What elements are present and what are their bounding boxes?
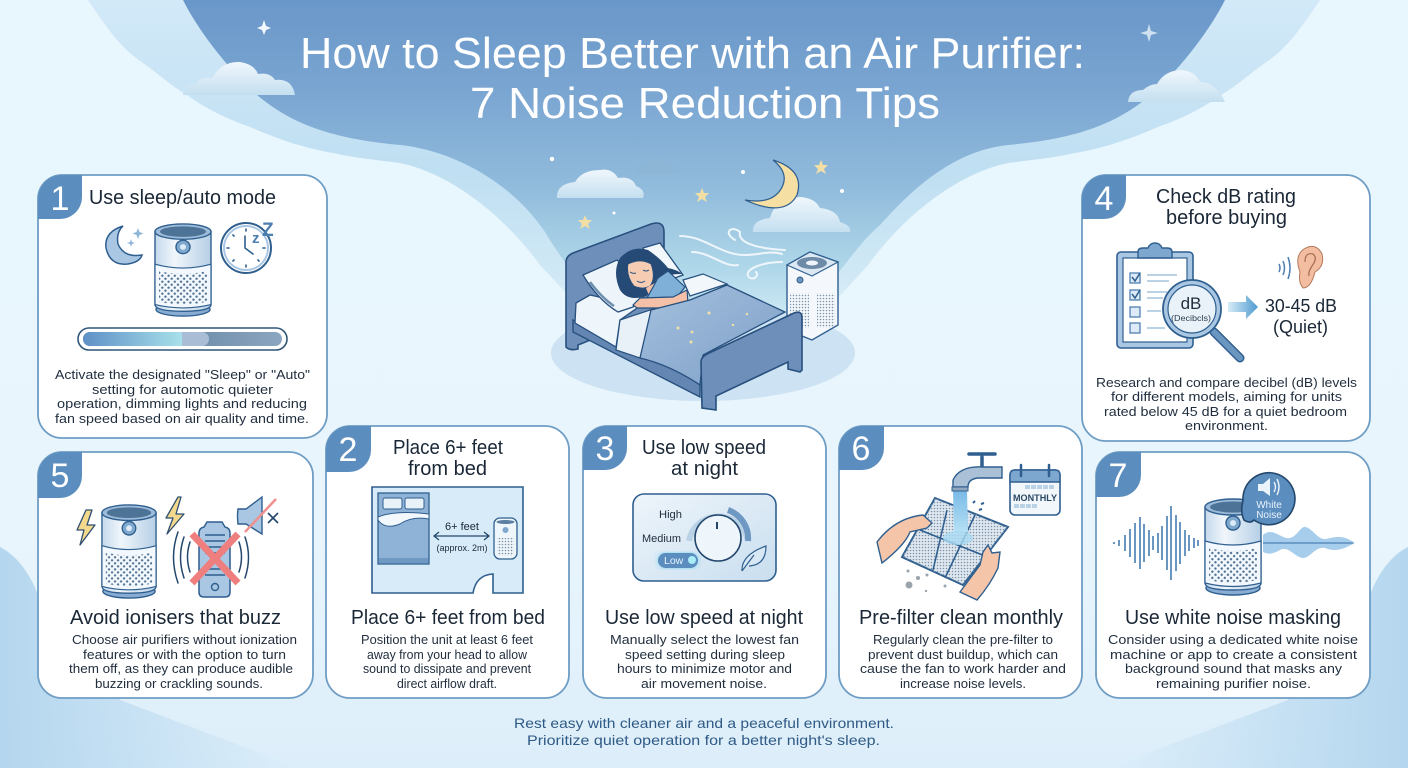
heading lower: Place 6+ feet from bed	[351, 607, 545, 629]
description: Activate the designated "Sleep" or "Auto"	[55, 367, 310, 382]
person	[616, 249, 688, 308]
number badge 6	[839, 426, 884, 470]
description: air movement noise.	[641, 676, 767, 691]
description: fan speed based on air quality and time.	[55, 411, 309, 426]
hero: sleeping person with air purifier	[550, 157, 855, 410]
description: away from your head to allow	[367, 647, 528, 662]
bed side rail	[573, 320, 700, 397]
stars	[550, 157, 844, 229]
number badge 7: 7	[1109, 457, 1127, 495]
waveform	[1114, 506, 1198, 580]
number badge 1	[38, 175, 82, 219]
heading: Use sleep/auto mode	[89, 187, 276, 209]
heading lower: Use low speed at night	[605, 607, 803, 629]
panel: tip 4 check dB rating	[1082, 175, 1370, 441]
label: 30-45 dB quiet	[1265, 296, 1337, 337]
moon	[745, 160, 799, 208]
night sky clouds	[557, 159, 850, 232]
icon: lightning bolts	[77, 497, 184, 545]
icon: purifier	[102, 505, 156, 598]
smooth wave	[1263, 527, 1355, 558]
description: features or with the option to turn	[83, 647, 286, 662]
heading	[642, 437, 766, 480]
top sheet	[683, 274, 727, 296]
icon: clock with zzz: z	[252, 230, 260, 247]
number badge 1: 1	[51, 180, 69, 218]
control dial panel	[633, 494, 776, 581]
description: cause the fan to work harder and	[860, 661, 1066, 676]
icon: ioniser crossed out	[174, 522, 248, 597]
speed slider bar	[78, 328, 287, 350]
panel: tip 6 pre-filter clean	[839, 426, 1082, 698]
icon: filter under tap with hands	[877, 454, 1060, 600]
description: Choose air purifiers without ionization	[72, 632, 297, 647]
headboard	[566, 223, 664, 350]
airflow lines	[680, 229, 785, 279]
room plan diagram	[372, 487, 523, 593]
description	[1096, 375, 1358, 433]
title: 7 Noise Reduction Tips	[470, 79, 940, 128]
mattress	[575, 295, 640, 347]
icon: air purifier	[155, 224, 211, 316]
blanket fold	[616, 309, 653, 358]
room plan diagram: (approx. 2m)	[436, 543, 488, 553]
pillow	[583, 260, 650, 312]
icon: magnifier with dB: dB	[1181, 294, 1201, 313]
description: for different models, aiming for units	[1111, 389, 1343, 404]
description: sound to dissipate and prevent	[363, 661, 531, 676]
label: 30-45 dB quiet: (Quiet)	[1273, 317, 1328, 337]
heading: Pre-filter clean monthly	[859, 607, 1063, 629]
footer note: Prioritize quiet operation for a better night's sleep.	[527, 732, 880, 748]
speech bubble: white noise	[1242, 473, 1295, 525]
description: machine or app to create a consistent	[1110, 647, 1357, 662]
description: Manually select the lowest fan	[610, 632, 799, 647]
number badge 2	[326, 426, 371, 472]
heading: Avoid ionisers that buzz	[70, 607, 281, 629]
description: increase noise levels.	[900, 676, 1026, 691]
control dial panel: Medium	[642, 533, 681, 545]
description	[361, 632, 533, 691]
pillow back	[643, 243, 683, 285]
description: background sound that masks any	[1125, 661, 1343, 676]
room plan diagram: 6+ feet	[445, 521, 479, 533]
icon: speaker muted	[238, 497, 278, 534]
description	[69, 632, 297, 691]
number badge 4: 4	[1095, 180, 1113, 218]
panel: tip 3 low speed at night	[583, 426, 826, 698]
description: speed setting during sleep	[625, 647, 785, 662]
description	[1108, 632, 1358, 691]
footer note: Rest easy with cleaner air and a peaceful environment.	[514, 715, 894, 731]
heading: before buying	[1166, 207, 1287, 229]
description: buzzing or crackling sounds.	[95, 676, 263, 691]
icon: magnifier with dB	[1163, 280, 1240, 358]
description: setting for automotic quieter	[92, 382, 274, 397]
arrow	[1228, 295, 1258, 319]
icon: magnifier with dB: (Decibcls)	[1171, 314, 1211, 323]
label: 30-45 dB quiet: 30-45 dB	[1265, 296, 1337, 316]
foot board	[701, 312, 802, 410]
blanket	[640, 285, 785, 385]
heading: from bed	[408, 458, 487, 480]
square air purifier	[787, 252, 838, 340]
number badge 5	[38, 452, 82, 498]
title	[300, 29, 1085, 128]
description	[55, 367, 310, 426]
heading: Use low speed	[642, 437, 766, 459]
speech bubble: white noise: Noise	[1256, 510, 1282, 521]
description: hours to minimize motor and	[617, 661, 792, 676]
description: operation, dimming lights and reducing	[57, 396, 307, 411]
description: Consider using a dedicated white noise	[1108, 632, 1358, 647]
icon: purifier	[1205, 499, 1261, 595]
speech bubble: white noise: White	[1256, 500, 1282, 511]
description	[610, 632, 799, 691]
panel: tip 7 white noise masking	[1096, 452, 1370, 698]
number badge 3	[583, 426, 627, 470]
number badge 2: 2	[339, 431, 357, 469]
heading: Use white noise masking	[1125, 607, 1341, 629]
icon: clipboard	[1117, 243, 1193, 348]
number badge 4	[1082, 175, 1126, 219]
title: How to Sleep Better with an Air Purifier:	[300, 29, 1085, 78]
icon: filter under tap with hands: MONTHLY	[1013, 493, 1057, 503]
description: Regularly clean the pre-filter to	[873, 632, 1053, 647]
number badge 3: 3	[596, 430, 614, 468]
control dial panel: High	[659, 509, 682, 521]
number badge 6: 6	[852, 430, 870, 468]
icon: clock with zzz: Z	[262, 220, 274, 241]
panel: tip 2 place 6+ feet from bed	[326, 426, 569, 698]
heading: Place 6+ feet	[393, 437, 503, 459]
description: Position the unit at least 6 feet	[361, 632, 533, 647]
description: rated below 45 dB for a quiet bedroom	[1104, 404, 1347, 419]
heading: Check dB rating	[1156, 186, 1296, 208]
heading	[1156, 186, 1296, 229]
description: Research and compare decibel (dB) levels	[1096, 375, 1358, 390]
decorative clouds and sparkles beside title	[183, 20, 1225, 102]
description	[860, 632, 1066, 691]
description: environment.	[1185, 418, 1268, 433]
icon: moon	[106, 226, 144, 264]
description: direct airflow draft.	[397, 676, 497, 691]
calendar	[1010, 470, 1060, 515]
description: them off, as they can produce audible	[69, 661, 293, 676]
description: prevent dust buildup, which can	[868, 647, 1058, 662]
heading	[393, 437, 503, 480]
ground ellipse	[551, 305, 855, 401]
description: remaining purifier noise.	[1156, 676, 1311, 691]
control dial panel: Low	[664, 555, 684, 567]
heading: at night	[671, 458, 738, 480]
footer note	[514, 715, 894, 748]
number badge 7	[1096, 452, 1141, 497]
icon: ear with sound waves	[1279, 246, 1323, 288]
number badge 5: 5	[51, 457, 69, 495]
panel: tip 5 avoid ionisers	[38, 452, 313, 698]
panel: tip 1 sleep/auto mode	[38, 175, 327, 438]
icon: clock with zzz	[221, 220, 274, 273]
